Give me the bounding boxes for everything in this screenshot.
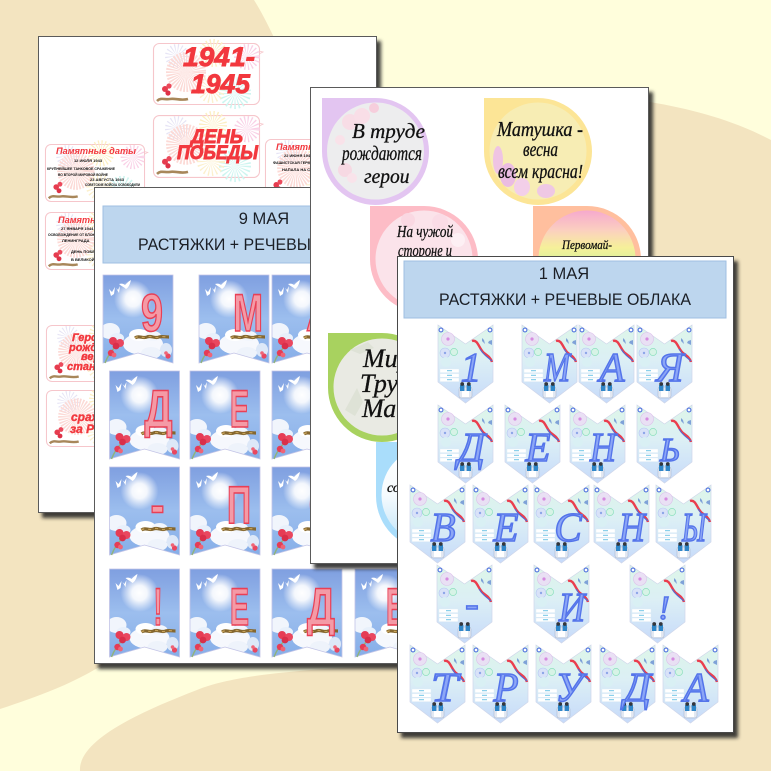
pennant: С [534, 485, 589, 563]
card: memorial dates, July 1943: 23 АВГУСТА 1943 [90, 177, 125, 182]
card: memorial dates, June 1941: Памятные даты [276, 142, 356, 152]
pennant: А: А [596, 344, 625, 390]
pennant: Р: Р [492, 664, 519, 710]
pennant: 1: 1 [461, 344, 481, 390]
speech cloud: green: Май! [361, 394, 418, 423]
pennant: У: У [555, 664, 587, 710]
banner: Н [269, 371, 342, 459]
banner: exclamation mark: ! [154, 578, 162, 637]
speech cloud: green [328, 333, 436, 442]
pennant: А: А [680, 664, 709, 710]
card: heroes slogan: станут [67, 361, 112, 373]
card: heroes slogan: рождаются [68, 342, 135, 354]
card: memorial dates, July 1943: Памятные даты [56, 146, 136, 156]
pennant: Т: Т [431, 664, 462, 710]
speech cloud: orange: Первомай- [561, 237, 612, 252]
card: memorial dates, July 1943: КРУПНЕЙШЕЕ ТАНКОВОЕ СРАЖЕНИЕ [47, 166, 115, 171]
header: 1 May: РАСТЯЖКИ + РЕЧЕВЫЕ ОБЛАКА [439, 291, 691, 309]
speech cloud: pink: стороне и [398, 241, 452, 260]
card: heroes slogan: Герои [72, 332, 105, 344]
pennant: Р [473, 645, 528, 723]
banner: dash: - [150, 476, 164, 535]
card: memorial dates, June 1941: 22 ИЮНЯ 1941 [284, 153, 313, 158]
pennant: И [534, 565, 589, 643]
pennant: Ь [637, 405, 692, 483]
banner: 9 [100, 275, 173, 363]
pennant: Д: Д [454, 424, 487, 470]
background: lighter wave bottom left [0, 632, 430, 771]
pennant: Е: Е [524, 424, 551, 470]
card: memorial dates, June 1941: НАПАЛА НА СССР [282, 167, 319, 172]
sheet: 1 May banners [398, 256, 734, 732]
banner: Н: Н [309, 380, 333, 439]
header: 1 May: 1 МАЯ [539, 265, 589, 283]
pennant: М [522, 325, 577, 403]
card: heroes slogan: верой [81, 351, 114, 363]
pennant: Н: Н [618, 504, 647, 550]
speech cloud: blue: солнце [387, 481, 426, 496]
banner: А: А [306, 284, 336, 343]
speech cloud: yellow [484, 98, 592, 205]
pennant: 1 [438, 325, 493, 403]
pennant: Д: Д [620, 664, 653, 710]
card: fight for the Motherland slogan: сражаться [71, 410, 139, 424]
banner: Е [352, 569, 425, 657]
card: memorial dates, January 1944: В ВЕЛИКОЙ [71, 257, 95, 262]
pennant: exclamation mark [630, 565, 685, 643]
sheet: memorial cards 1941-1945 [38, 36, 376, 512]
banner: exclamation mark [106, 569, 180, 657]
card: 1941-1945: 1945 [191, 69, 251, 99]
header: 9 May: РАСТЯЖКИ + РЕЧЕВЫЕ ОБЛАКА [138, 236, 390, 254]
banner: Д [269, 569, 342, 657]
banner: М [196, 275, 269, 363]
banner: П: П [227, 476, 251, 535]
pennant: У [536, 645, 591, 723]
banner: Е: Е [230, 380, 249, 439]
pennant: Н: Н [589, 424, 618, 470]
card: fight for the Motherland slogan: за Родину [70, 422, 131, 436]
card: День Победы [154, 116, 263, 177]
sheet: speech clouds [310, 88, 648, 564]
speech cloud: purple: В труде [352, 119, 425, 143]
header: 1 May [404, 261, 726, 318]
banner: dash [106, 467, 180, 555]
card: heroes slogan [46, 325, 149, 382]
pennant: Ы [656, 485, 711, 563]
speech cloud: orange [533, 206, 641, 313]
speech cloud: purple: герои [364, 167, 410, 188]
speech cloud: yellow: Матушка - [496, 117, 583, 141]
pennant: Д [438, 405, 493, 483]
card: memorial dates, January 1944: Памятные даты [58, 215, 138, 225]
pennant: С: С [554, 504, 582, 550]
card: memorial dates, July 1943: 12 ИЮЛЯ 1943 [74, 158, 103, 163]
banner: Е: Е [230, 578, 249, 637]
banner: М: М [233, 284, 263, 343]
pennant: А [663, 645, 718, 723]
banner: Е: Е [386, 578, 405, 637]
pennant: Н [594, 485, 649, 563]
speech cloud: pink: На чужой [396, 222, 453, 241]
banner: Е [187, 569, 260, 657]
banner: А [269, 275, 342, 363]
pennant: Я: Я [655, 344, 686, 390]
speech cloud: pink [370, 206, 478, 313]
pennant: Е [473, 485, 528, 563]
pennant: Я [637, 325, 692, 403]
banner: П [187, 467, 260, 555]
pennant: И: И [558, 584, 587, 630]
card: memorial dates, January 1944: ДЕНЬ ПОБЕДЫ [71, 249, 102, 254]
pennant: Д [600, 645, 655, 723]
card: memorial dates, June 1941: ФАШИСТСКАЯ ГЕРМАНИЯ [273, 160, 321, 165]
card: 1941-1945 [154, 42, 263, 104]
pennant: Е: Е [492, 504, 519, 550]
pennant: dash [437, 565, 492, 643]
card: memorial dates, July 1943 [45, 144, 148, 202]
banner: Д: Д [307, 578, 335, 637]
pennant: Е [505, 405, 560, 483]
card: День Победы: ПОБЕДЫ [177, 143, 259, 164]
pennant: Ь: Ь [659, 432, 680, 469]
pennant: Н [570, 405, 625, 483]
card: memorial dates, January 1944: 27 ЯНВАРЯ 1944 [61, 226, 94, 231]
header: 9 May: 9 МАЯ [239, 210, 289, 228]
card: memorial dates, January 1944: ЛЕНИНГРАДА [62, 238, 90, 243]
banner: О [269, 467, 342, 555]
card: День Победы: ДЕНЬ [189, 127, 243, 148]
banner: Д: Д [144, 380, 172, 439]
sheet: 9 May banners [94, 188, 432, 664]
card: fight for the Motherland slogan [46, 390, 149, 447]
background: lighter wave top right [254, 0, 771, 140]
card: memorial dates, January 1944 [45, 212, 148, 270]
speech cloud: green: Труд! [360, 369, 420, 398]
speech cloud: purple: рождаются [340, 144, 422, 165]
banner: Е [187, 371, 260, 459]
card: memorial dates, January 1944: ОСВОБОЖДЕНИЕ ОТ БЛОКАДЫ [48, 232, 103, 237]
speech cloud: yellow: всем красна! [498, 161, 583, 183]
banner: Д [106, 371, 180, 459]
pennant: М: М [543, 344, 572, 390]
speech cloud: purple [322, 98, 429, 205]
banner: О: О [309, 476, 333, 535]
card: 1941-1945: 1941- [183, 42, 255, 72]
pennant: В [410, 485, 465, 563]
card: memorial dates, July 1943: ВО ВТОРОЙ МИРОВОЙ ВОЙНЕ [58, 172, 108, 177]
pennant: А [579, 325, 634, 403]
pennant: Т [410, 645, 465, 723]
speech cloud: yellow: весна [523, 139, 558, 161]
banner: 9: 9 [141, 284, 163, 343]
pennant: Ы: Ы [681, 504, 707, 550]
card: memorial dates, June 1941 [265, 140, 368, 200]
pennant: dash: - [465, 580, 479, 626]
pennant: В: В [430, 504, 456, 550]
speech cloud: blue [376, 442, 484, 550]
card: memorial dates, July 1943: СОВЕТСКИЕ ВОЙСКА ОСВОБОДИЛИ [85, 182, 140, 187]
pennant: exclamation mark: ! [658, 590, 670, 627]
speech cloud: green: Мир! [362, 344, 419, 373]
header: 9 May [103, 206, 425, 263]
